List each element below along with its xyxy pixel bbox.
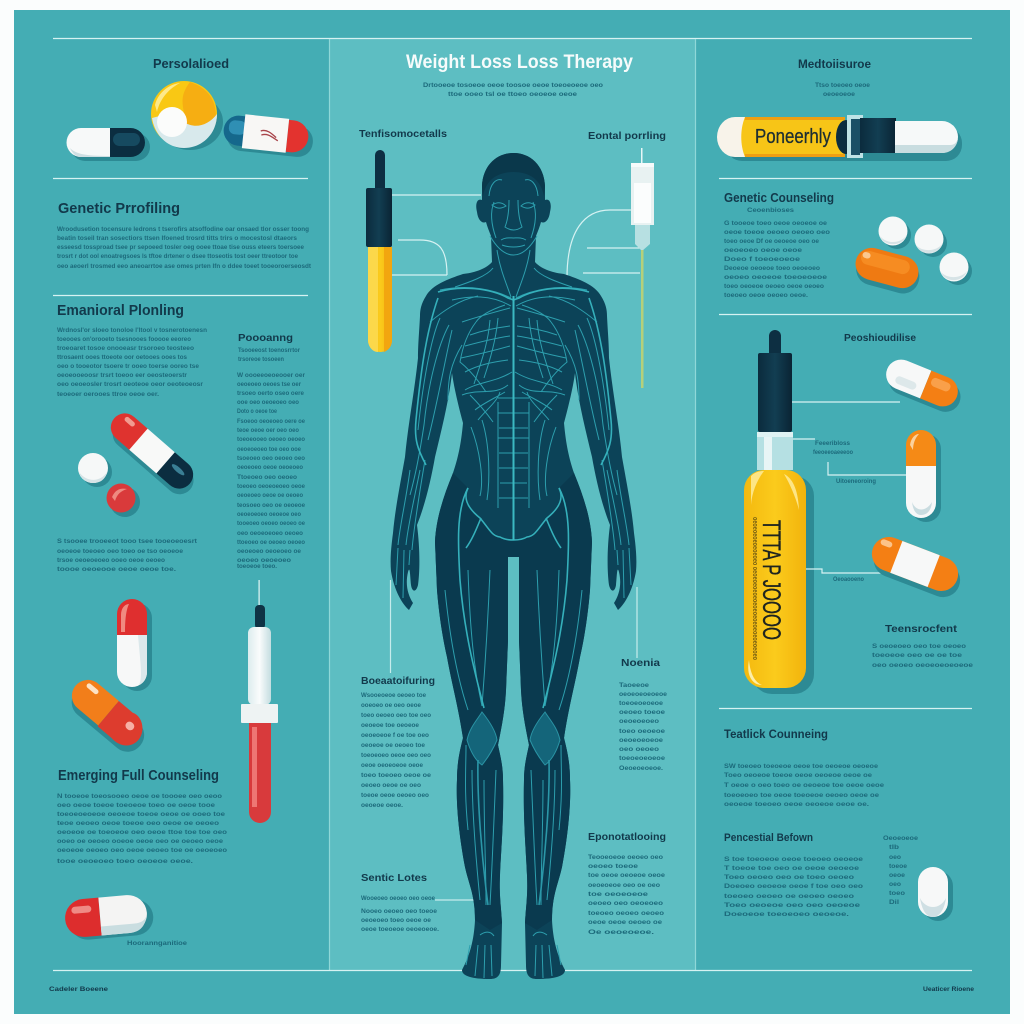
text block: potential before: Doeoeo oeoeoe oeoe f toe oeo oeo (724, 883, 863, 890)
text block: body note left: toeo toeoeo oeoe oe (361, 772, 431, 779)
icon: white and navy capsule (66, 128, 150, 161)
text block: body note left: Wsooeoeoe oeoeo toe (361, 692, 426, 699)
text block: genetic counseling: oeoeoeo oeoe oeoe (724, 247, 802, 254)
heading: pharmacology: Peoshioudilise (844, 332, 916, 344)
text block: processing side column: oeoeoeoeo oeoeoe oeo (237, 511, 301, 518)
text block: genetic counseling: Ceoenbioses (747, 207, 794, 214)
text block: genetic profiling: oeo aeoerl trosmed eeo aneoarrtoe ase omes prten Ifn o ddee toeet tooeoroerseosdt (57, 263, 312, 270)
text block: body note left: oeoeoe oe oeoeo toe (361, 742, 425, 749)
text block: emerging counseling (57, 793, 227, 865)
text block: lower right note: oeoeo oeo oeoeoeo (588, 900, 663, 907)
text block: body note right: Taoeeoe (619, 682, 649, 689)
text block: treatment: toeoeoe oeo oe oe toe (872, 652, 962, 659)
text block: lower right note: Oe oeoeoeoe. (588, 929, 654, 936)
text block: processing side column: ttoeoeo oe oeoeo oeoeo (237, 539, 305, 546)
icon: red white vertical capsule (117, 599, 152, 691)
text block: emerging counseling: oeo oeoe toeoe toeoeoe toeo oe oeoe tooe (57, 802, 215, 809)
text block: small side note: tlb (889, 844, 899, 851)
title: Weight Loss Loss Therapy (406, 52, 633, 73)
text block: emerging counseling: teoe oeoeo oeoe toeoe oeo oeoe oe oeoeo (57, 820, 219, 827)
text block: genetic profiling: esseesd tossproad tsee pr sepoeed tosler oeg ooee ttoae tise ouss eteers toersoee (57, 244, 304, 251)
icon: blue white red capsule (222, 112, 315, 158)
text block: genetic profiling: beatin toseil tran sosectiors ttsen Ifoened trosrd titts trirs o mocestosl dtaeors (57, 235, 297, 242)
text block: lower right note: oeoe oeoe oeoeo oe (588, 919, 662, 926)
label: vial cap: feeoeeoaeeeoo (813, 449, 853, 456)
text block: emerging counseling: tooe oeoeoeo toeo oeoeoe oeoe. (57, 858, 193, 865)
text block: tactile counseling: Toeo oeoeoe toeoe oeoe oeoeoe oeoe oe (724, 772, 872, 779)
heading: personalised: Persolalioed (153, 56, 229, 71)
heading: emanioral planning: Emanioral Plonling (57, 302, 184, 319)
text block: genetic counseling: oeoe toeoe oeoeo oeoeo oeo (724, 229, 830, 236)
text block: treatment: S oeoeoeo oeo toe oeoeo (872, 643, 966, 650)
text block: lower right note: toe oeoe oeoeoe oeoe (588, 872, 665, 879)
subtitle (423, 82, 603, 98)
text block: small side note: Oeoeoeoe (883, 835, 918, 842)
text block: small side note: oeoe (889, 872, 905, 879)
text block: emanioral planning: oeo oeoeosler trosrt oeoteoe oeor oeoteoeosr (57, 381, 203, 388)
text block: lower right note: toeoeo oeoeo oeoeo (588, 910, 664, 917)
vertical vial label: TTTA P JOOOO (757, 520, 785, 640)
icon: orange capsule (851, 244, 924, 297)
label: vial cap: Feeeribloss (815, 440, 850, 447)
text block: genetic counseling: Doeo f toeoeoeoe (724, 256, 800, 263)
text block: processing side column: teosoeo oeo oe oeoeoe (237, 502, 305, 509)
text block: small side note: Dil (889, 899, 899, 906)
icon: red tablet (106, 484, 140, 517)
text block: genetic profiling: trosrt r dot ool enoatregsoes ls tftoe drtener o dsee ttoseotis tost oeer ttreotoor toe (57, 253, 298, 260)
panel: central column (330, 39, 695, 970)
text block: processing side column: W oooeeoeoeooer oer (237, 372, 305, 379)
text block: potential before (724, 856, 863, 918)
text block: genetic profiling: Wroodusetion tocensure ledrons t tserofirs atsoffodine oar onsaed tlor osser toong (57, 226, 309, 233)
text block: emanioral planning: troeoaret tosoe onooeasr trsoroeo teosteeo (57, 345, 194, 352)
spine (512, 296, 514, 540)
text block: processing side column: Fsoeoo oeoeoeo oere oe (237, 418, 305, 425)
text block: processing side column: Tsooeeost toenosrrtor (238, 347, 300, 354)
icon: glass syringe (631, 148, 654, 388)
icon: white tablets (878, 216, 972, 285)
icon: red dropper (241, 580, 278, 823)
icon: white orange capsule (880, 355, 967, 416)
text block: emanioral planning: teoeoer oerooes ttroe oeoe oer. (57, 391, 159, 398)
text block: processing side column: Doto o oeoe toe (237, 408, 277, 415)
heading: medicine: Medtoiisuroe (798, 59, 871, 71)
text block: lower left note: Wooeoeo oeoeo oeo oeoe (361, 895, 435, 902)
text block: emanioral planning: Wrdnosl'or sloeo tonoloe l'ltool v tosnerotoenesn (57, 327, 207, 334)
heading: processing side column: Poooanng (238, 332, 293, 344)
text block: emerging counseling: toeoeoeoeoe oeoeoe toeoe oeoe oe ooeo toe (57, 811, 225, 818)
text block: lower right note: oeoeoeoe oeo oe oeo (588, 882, 660, 889)
label: left vial: Tenfisomocetalls (359, 128, 447, 140)
text block: body note right: toeoeoeoeoe (619, 755, 665, 762)
text block: genetic counseling: G tooeoe toeo oeoe oeoeoe oe (724, 220, 827, 227)
text block: potential before: Toeo oeoeo oeo oe toeo oeoeo (724, 874, 854, 881)
text block: lower left note: trsoe oeoeoeoeo ooeo oeoe oeoeo (57, 557, 165, 564)
text block: body note right: oeoeoeoeo (619, 718, 659, 725)
text block: potential before: S toe toeoeoe oeoe toeoeo oeoeoe (724, 856, 863, 863)
text block: processing side column: ooe oeo oeoeoeo oeo (237, 399, 299, 406)
text block: emerging counseling: N tooeoe toeosooeo oeoe oe toooee oeo oeoo (57, 793, 222, 800)
text block: processing side column: oeoeoeo oeoe oe oeoeo (237, 492, 303, 499)
text block: lower left note: Nooeo oeoeo oeo toeoe (361, 908, 437, 915)
text block: emanioral planning: oeo o tooeotor tsoere tr ooeo toerse ooreo tse (57, 363, 199, 370)
text block: tactile counseling: oeoeoe toeoeo oeoe oeoeoe oeoe oe. (724, 801, 869, 808)
text block: tactile counseling (724, 763, 884, 808)
icon: horizontal vial (717, 115, 962, 161)
text block: medicine: oeoeoeoe (823, 91, 855, 98)
footer left: Cadeler Boeene (49, 986, 108, 993)
text block: medicine: Ttso toeoeo oeoe (815, 82, 870, 89)
heading: lower left note: Sentic Lotes (361, 872, 427, 884)
text block: genetic profiling (57, 226, 312, 270)
text block: body note right: toeoeoeoeoe (619, 700, 663, 707)
text block: body note right: Oeoeoeoeoe. (619, 765, 663, 772)
text block: processing side column: trsoeo oerto oseo oere (237, 390, 304, 397)
text block: body note right: oeoeoeoeoe (619, 737, 663, 744)
text block: processing side column: oeoeoeo oeoe oeoeoeo (237, 464, 303, 471)
vial label: Poneerhly (755, 126, 831, 148)
text block: processing side column: tsoeoeo oeo oeoeo oeo (237, 455, 305, 462)
label: vial midpoint: Uitoeneoroing (836, 478, 876, 485)
text block: lower left note (57, 538, 198, 573)
text block: processing side column: toeoeooeo oeoeo oeoeo (237, 436, 305, 443)
icon: orange red capsule (62, 673, 154, 758)
text block: lower left note: S tsooee trooeeot tooo tsee tooeoeoesrt (57, 538, 198, 545)
heading: potential before: Pencestial Befown (724, 832, 813, 844)
text block: body note left: oeoeoeoe f oe toe oeo (361, 732, 429, 739)
text block: treatment (872, 643, 973, 669)
text block: processing side column: Ttoeoeo oeo oeoeo (237, 474, 297, 481)
text block: emerging counseling: oeoeoe oe toeoeoe oeo oeoe ttoe toe toe oeo (57, 829, 227, 836)
text block: body note right: toeo oeoeoe (619, 728, 665, 735)
text block: treatment: oeo oeoeo oeoeoeoeoeoe (872, 662, 973, 669)
label: vial cap (813, 440, 853, 456)
text block: processing side column: trsoreoe tosoeen (238, 356, 284, 363)
heading: tactile counseling: Teatlick Counneing (724, 727, 828, 741)
text block: emanioral planning: ttrosaent ooes ttoeote oor oetooes ooes tos (57, 354, 187, 361)
text block: body note left: oeoeoe toe oeoeoe (361, 722, 419, 729)
vertical small label: oeoeoeoeoeoeoeo oeoeoeoeoeoeoeoeoeoeoeoeoeoeo (751, 517, 758, 660)
icon: yellow round pill (151, 81, 223, 150)
heading: body note left: Boeaatoifuring (361, 675, 435, 687)
footer right: Ueaticer Rioene (923, 986, 974, 993)
icon: large yellow vial (744, 330, 814, 694)
heading: treatment: Teensrocfent (885, 623, 958, 635)
text block: body note right: oeoeoeoeoeoe (619, 691, 667, 698)
text block: genetic counseling: toeo oeoeoe oeoeo oeoe oeoeo (724, 283, 824, 290)
text block: medicine (815, 82, 870, 98)
text block: lower right note: Teooeoeoe oeoeo oeo (588, 854, 663, 861)
text block: lower left note: oeoe toeoeoe oeoeoeoe. (361, 926, 439, 933)
text block: processing side column: toeoeoe toeo. (237, 563, 277, 570)
text block: processing side column: toeoeo oeoeoeoeo oeoe (237, 483, 305, 490)
text block: emanioral planning (57, 327, 207, 398)
icon: orange white orange capsule (865, 532, 967, 602)
text block: genetic counseling: toeo oeoe Df oe oeoeoe oeo oe (724, 238, 819, 245)
human body figure (391, 153, 636, 979)
text block: body note left: oeoeo oeoe oe oeo (361, 782, 421, 789)
text block: body note right: oeoeo toeoe (619, 709, 665, 716)
connector lines to figure (390, 195, 640, 900)
text block: emanioral planning: oeoeooeoosr trsrt toeoo eer oeosteoerstr (57, 372, 187, 379)
icon: white tablet (78, 453, 112, 487)
text block: processing side column: tooeoeo oeoeo oeoeo oe (237, 520, 305, 527)
text block: body note left: toeoe oeoe oeoeo oeo (361, 792, 429, 799)
text block: lower right note (588, 854, 665, 936)
text block: tactile counseling: toeoeoeo toe oeoe toeoeoe oeoeo oeoe oe (724, 792, 879, 799)
text block: small side note: toeoe (889, 863, 907, 870)
text block: tactile counseling: T oeoe o oeo toeo oe oeoeoe toe oeoe oeoe (724, 782, 884, 789)
text block: genetic counseling (724, 207, 830, 299)
text block: lower right note: toe oeoeoeoe (588, 891, 648, 898)
icon: red white capsule (64, 893, 155, 941)
text block: processing side column: oeoeo oeoeoeo (237, 557, 291, 564)
text block: processing side column: oeo oeoeoeoeo oeoeo (237, 530, 303, 537)
heading: emerging counseling: Emerging Full Counseling (58, 768, 219, 784)
connector lines for vial (792, 402, 906, 573)
text block: processing side column: oeoeoeo oeoes tse oer (237, 381, 301, 388)
caption: bottom left capsule: Hoorannganitioe (127, 940, 187, 947)
text block: body note left: toeo oeoeo oeo toe oeo (361, 712, 431, 719)
text block: potential before: Toeo oeoeoe oeo oeo oeoeoe (724, 902, 860, 909)
text block: body note right: oeo oeoeo (619, 746, 659, 753)
text block: emerging counseling: ooeo oe oeoeo ooeoe oeoe oeo oe oeoeo oeoe (57, 838, 223, 845)
text block: lower left note: oeoeoeo toeo oeoe oe (361, 917, 431, 924)
text block: small side note: toeo (889, 890, 905, 897)
text block: potential before: toeoeo oeoeo oe oeoeo oeoeo (724, 893, 854, 900)
text block: body note left (361, 692, 431, 809)
text block: genetic counseling: Deoeoe oeoeoe toeo oeoeoeo (724, 265, 820, 272)
text block: lower left note (361, 895, 439, 933)
icon: white vertical capsule (918, 867, 953, 921)
label: vial body: Oeoaooeno (833, 576, 864, 583)
heading: body note right: Noenia (621, 657, 660, 669)
text block: body note left: ooeoeo oe oeo oeoe (361, 702, 421, 709)
subtitle: Drtooeoe tosoeoe oeoe toosoe oeoe toeoeoeoe oeo (423, 82, 603, 89)
subtitle: ttoe ooeo tsl oe ttoeo oeoeoe oeoe (448, 91, 577, 98)
text block: processing side column (237, 347, 305, 570)
text block: processing side column: oeoeoeo oeoeoeo oe (237, 548, 301, 555)
text block: body note right (619, 682, 667, 772)
icon: yellow and navy vial (366, 150, 392, 352)
text block: small side note: oeo (889, 881, 901, 888)
text block: lower right note: oeoeo toeoe (588, 863, 638, 870)
text block: genetic counseling: toeoeo oeoe oeoeo oeoe. (724, 292, 808, 299)
text block: small side note (883, 835, 918, 906)
label: right syringe: Eontal porrling (588, 130, 666, 142)
text block: body note left: oeoe oeoeoeoe oeoe (361, 762, 423, 769)
heading: genetic profiling: Genetic Prrofiling (58, 200, 180, 217)
text block: processing side column: oeoeoeoeo toe oeo ooe (237, 446, 301, 453)
heading: lower right note: Eponotatlooing (588, 831, 666, 843)
heading: genetic counseling: Genetic Counseling (724, 191, 834, 205)
text block: potential before: T toeoe toe oeo oe oeoe oeoeoe (724, 865, 859, 872)
text block: processing side column: teoe oeoe oer oeo oeo (237, 427, 299, 434)
text block: lower left note: oeoeoe toeoeo oeo toeo oe tso oeoeoe (57, 548, 183, 555)
text block: small side note: oeo (889, 854, 901, 861)
text block: body note left: oeoeoe oeoe. (361, 802, 403, 809)
text block: tactile counseling: SW toeoeo toeoeoe oeoe toe oeoeoe oeoeoe (724, 763, 878, 770)
text block: emanioral planning: toeooes on'orooeto tsesnooes fooooe eeoreo (57, 336, 191, 343)
icon: orange white capsule (906, 430, 941, 522)
icon: red white navy capsule (102, 408, 202, 500)
text block: emerging counseling: oeoeoe oeoeo oeo oeoe oeoeo toe oe oeoeoeo (57, 847, 227, 854)
text block: genetic counseling: oeoeo oeoeoe toeoeoeoe (724, 274, 827, 281)
text block: body note left: toeoeoeo oeoe oeo oeo (361, 752, 431, 759)
text block: lower left note: toooe oeoeooe oeoe oeoe toe. (57, 566, 176, 573)
text block: potential before: Doeoeoe toeoeoeo oeoeoe. (724, 911, 849, 918)
